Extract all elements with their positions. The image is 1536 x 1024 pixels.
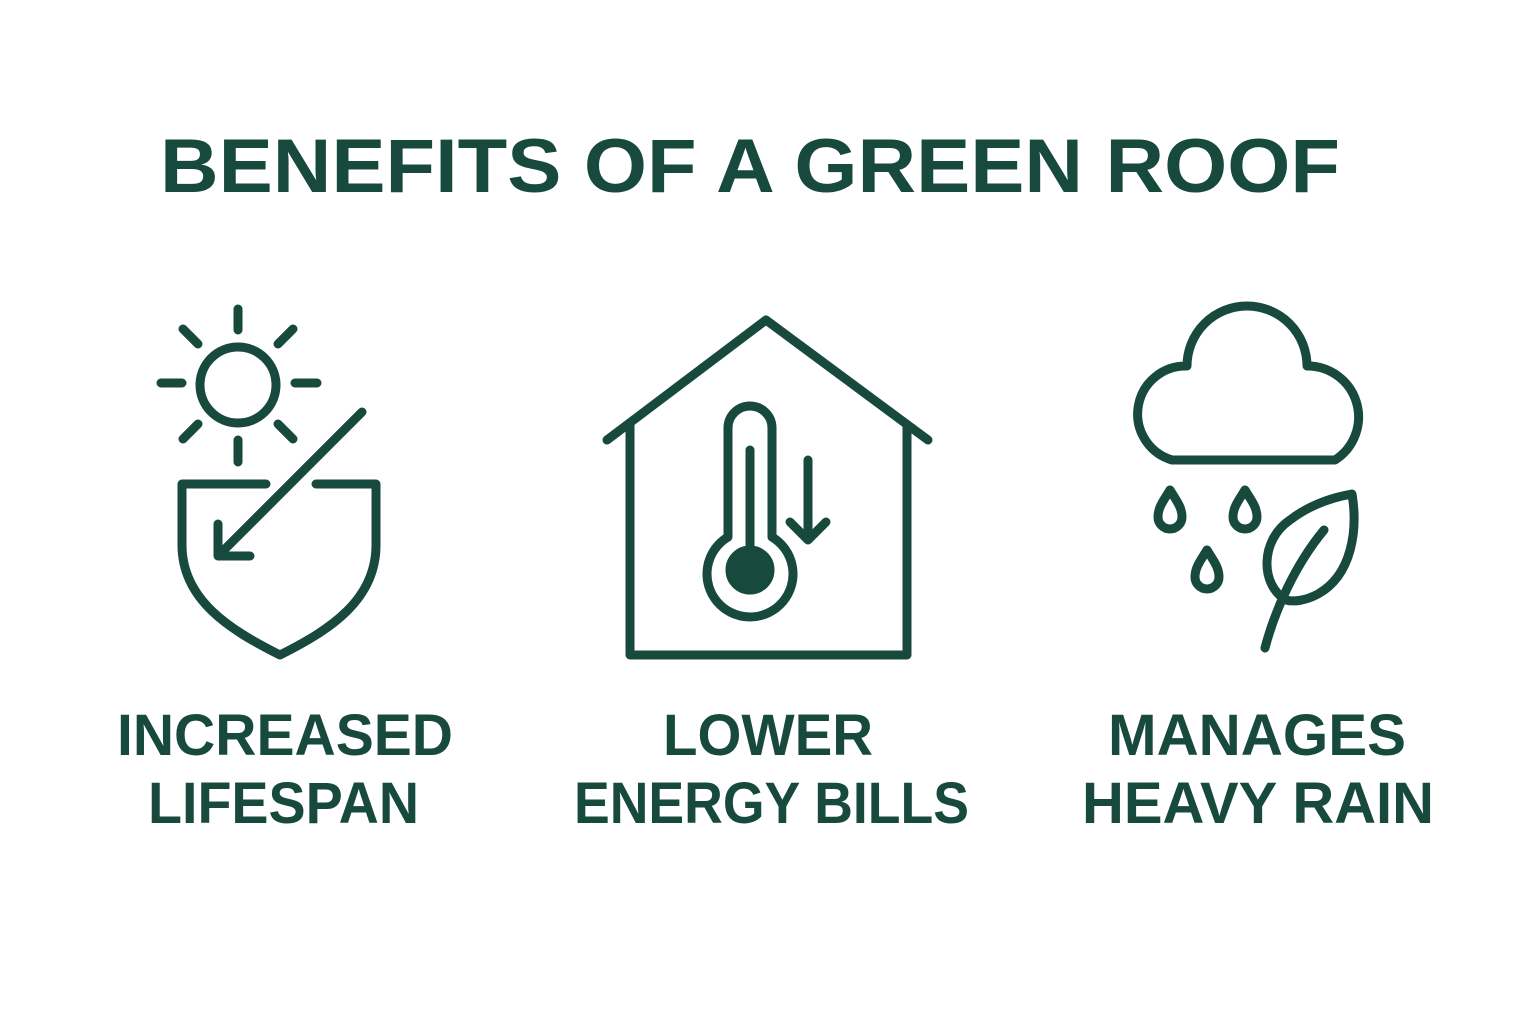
icon: house with thermometer (lower energy bills) (607, 320, 928, 655)
title: BENEFITS OF A GREEN ROOF (160, 124, 1340, 209)
label: lower energy bills: LOWER (663, 703, 873, 768)
label: manages heavy rain: MANAGES (1108, 703, 1406, 768)
label: increased lifespan: INCREASED (117, 703, 453, 768)
label: lower energy bills (574, 703, 969, 836)
icon: cloud, rain and leaf (manages heavy rain) (1138, 306, 1359, 648)
label: manages heavy rain: HEAVY RAIN (1082, 771, 1434, 836)
label: lower energy bills: ENERGY BILLS (574, 771, 969, 836)
label: manages heavy rain (1082, 703, 1434, 836)
icon: sun and shield (increased lifespan) (161, 309, 376, 655)
label: increased lifespan (117, 703, 453, 836)
label: increased lifespan: LIFESPAN (148, 771, 419, 836)
